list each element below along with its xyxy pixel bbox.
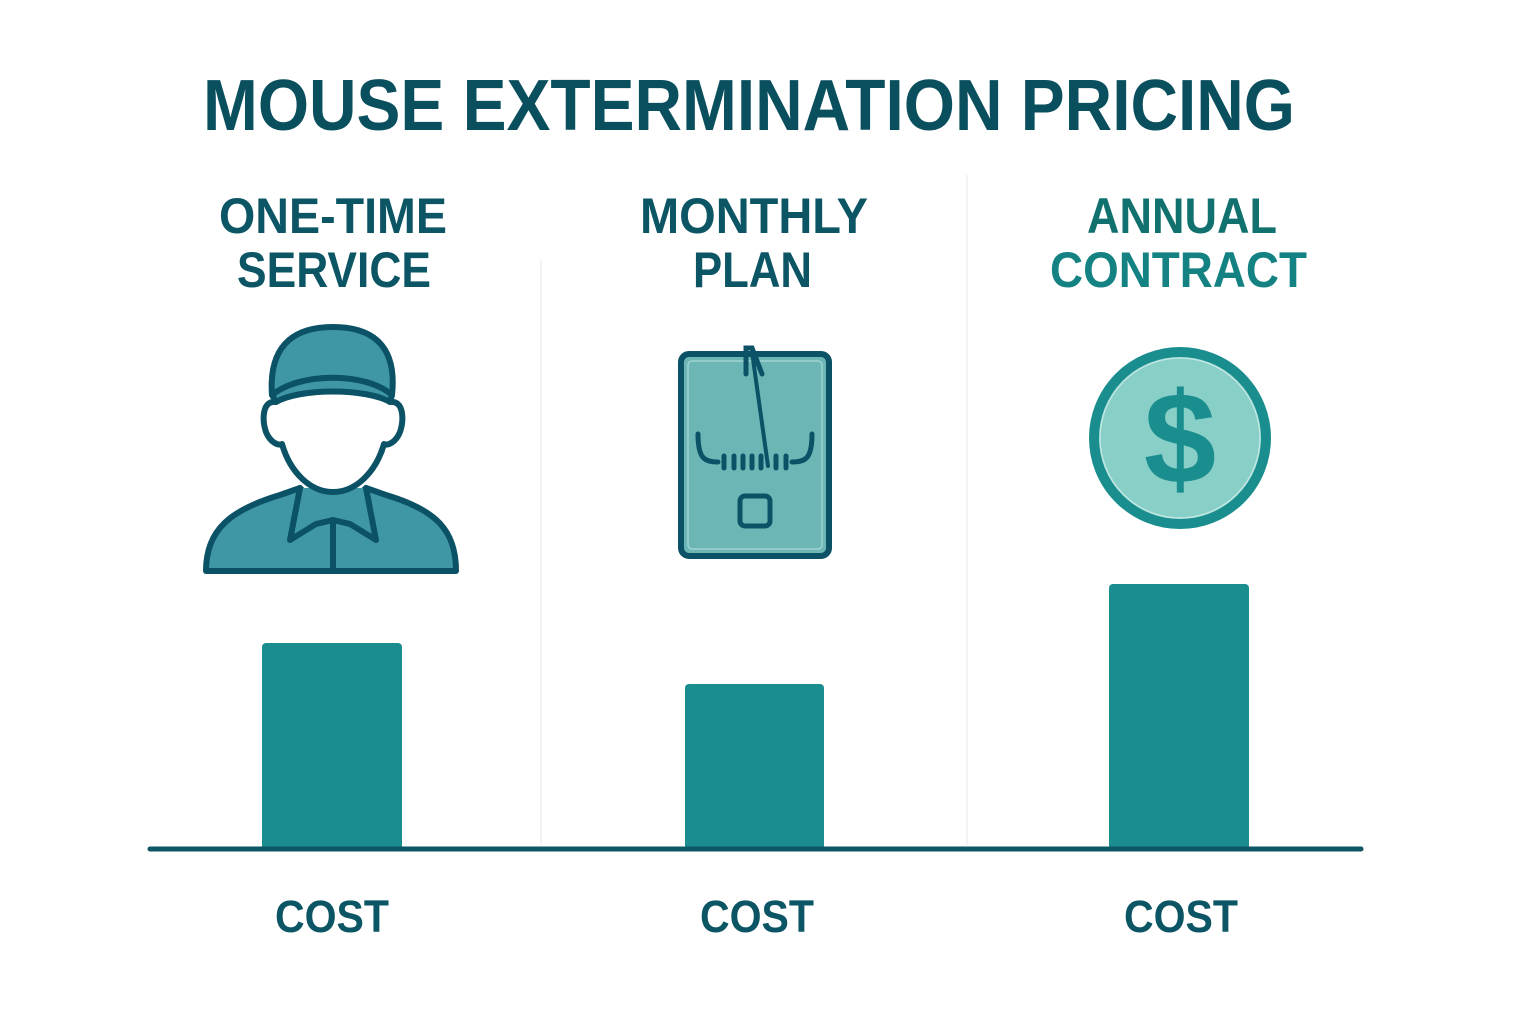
bar chart	[150, 584, 1361, 850]
heading: annual contract	[1050, 188, 1307, 298]
bar: annual	[1109, 584, 1249, 850]
heading: annual contract: ANNUAL	[1087, 188, 1277, 244]
bar: monthly	[685, 684, 824, 850]
bar: one-time	[262, 643, 402, 850]
heading: one-time service	[219, 188, 447, 298]
heading: one-time service: ONE-TIME	[219, 188, 447, 244]
cost labels: COST	[275, 891, 389, 942]
heading: one-time service: SERVICE	[237, 242, 431, 298]
heading: annual contract: CONTRACT	[1050, 242, 1307, 298]
heading: monthly plan	[640, 188, 868, 298]
icon: dollar coin	[1094, 352, 1266, 524]
icon: mouse trap	[681, 348, 829, 556]
cost labels: COST	[1124, 891, 1238, 942]
heading: monthly plan: PLAN	[693, 242, 812, 298]
icon: dollar coin: $	[1144, 365, 1216, 511]
baseline	[150, 846, 1361, 852]
icon: technician	[206, 327, 456, 571]
cost labels	[275, 891, 1238, 942]
cost labels: COST	[700, 891, 814, 942]
heading: monthly plan: MONTHLY	[640, 188, 868, 244]
title: MOUSE EXTERMINATION PRICING	[203, 66, 1295, 146]
